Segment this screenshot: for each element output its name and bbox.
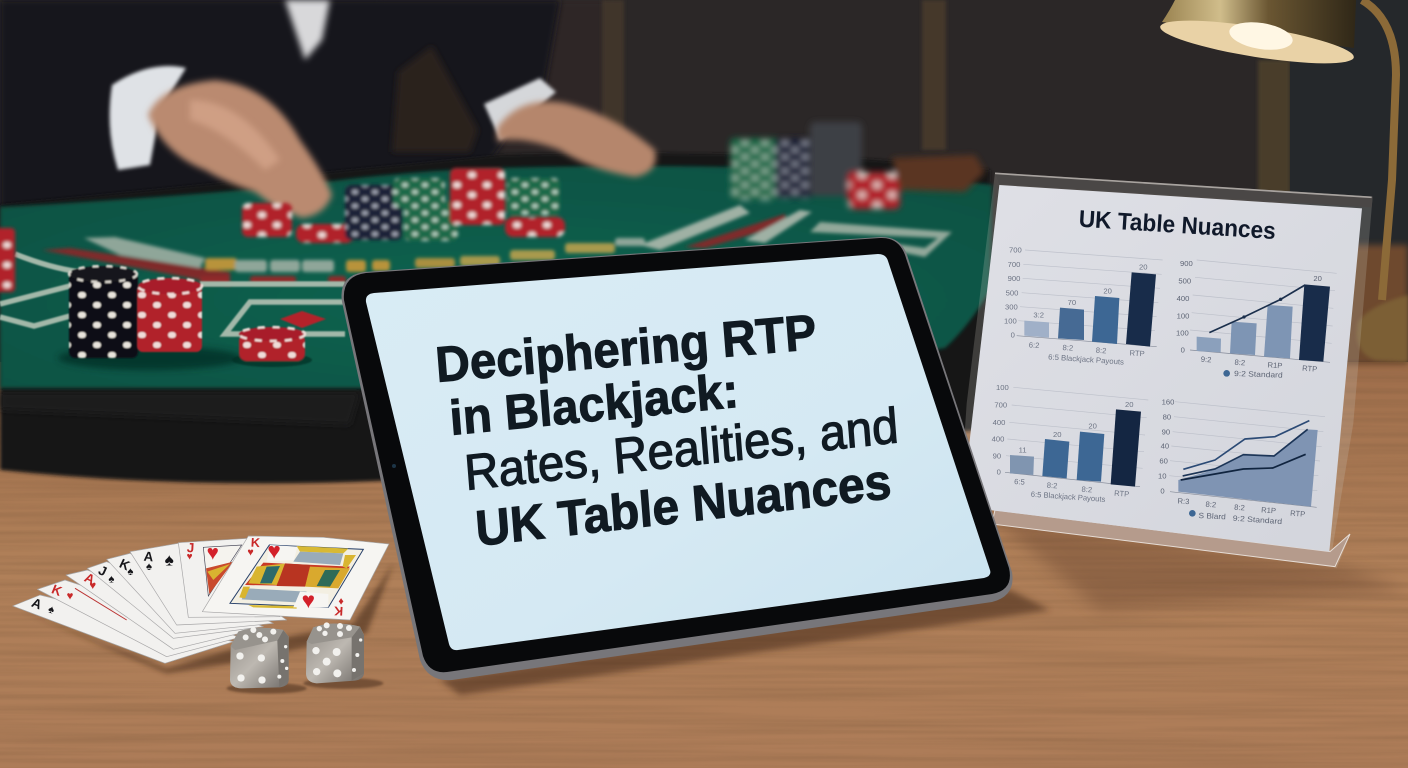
chart: top-left bars: 500 [1006,288,1018,297]
chart: top-left bars: 70 [1068,298,1076,307]
chart: top-left bars: 20 [1103,287,1112,296]
king of hearts card [202,536,389,620]
chart: bottom-left bars: 700 [994,401,1007,410]
king of hearts card: ♥ [302,587,315,613]
left cuff [110,66,186,170]
chart: bottom-right area and lines: 0 [1160,486,1165,495]
chart: bottom-right area and lines: 160 [1162,397,1174,406]
chart: bottom-right area and lines: 9:2 Standard [1233,514,1282,526]
card pips: A [143,549,154,565]
chart: top-left bars [1004,246,1163,367]
tablet shadow [440,590,1050,695]
lamp shade [1162,0,1356,48]
acrylic frame [960,173,1373,568]
card pips: A [82,570,97,588]
dealer jacket [0,0,560,215]
playing cards fan [13,536,393,673]
chart: bottom-left bars: 0 [997,467,1001,476]
chart: bottom-left bars: 20 [1053,430,1062,439]
chart: top-right bars with line: 100 [1177,311,1189,320]
front camera [392,464,396,468]
king of hearts card: K [333,603,343,618]
chart: bottom-left bars: 400 [992,435,1004,444]
chart: top-right bars with line: 9:2 [1201,355,1212,364]
chart: top-left bars: 100 [1004,316,1017,325]
card pips: J [187,540,195,555]
chart: bottom-left bars: 100 [996,383,1009,392]
card: ace of hearts [66,570,253,649]
chart: top-left bars: 700 [1008,260,1020,269]
dealer arms and hands [110,66,656,218]
king of hearts card: K [251,536,261,550]
chart: bottom-left bars: RTP [1114,489,1130,499]
chart: top-left bars: RTP [1129,348,1145,358]
right cuff [484,78,556,140]
far chip stacks [242,168,565,243]
chart: bottom-left bars: 400 [993,418,1005,427]
table lines [0,254,345,334]
small red chip stack [232,327,312,367]
chart: bottom-left bars: 20 [1088,422,1097,431]
card pips [30,540,195,617]
die left [230,627,289,688]
dice [227,622,383,694]
chart: bottom-left bars: 8:2 [1081,485,1092,494]
dealer shirt [285,0,330,60]
chart: bottom-right area and lines: R:3 [1177,496,1190,506]
card: jack of hearts [178,538,280,617]
chart: top-left bars: 8:2 [1096,346,1107,355]
die right [306,622,364,683]
chart: top-right bars with line: 400 [1177,294,1189,303]
legend dot [1189,510,1196,517]
card pips: ♥ [67,590,74,602]
chart: top-left bars: 8:2 [1062,343,1073,353]
card pips: ♥ [187,551,193,562]
chart: top-left bars: 0 [1011,331,1015,340]
desk lamp [1158,0,1408,362]
chart: bottom-left bars: 8:2 [1047,481,1058,490]
blackjack table [0,153,992,483]
card shadow [20,563,393,673]
chart: top-right bars with line: RTP [1302,364,1318,374]
card pips: K [117,556,132,574]
legend dot [1223,370,1230,377]
card pips: ♠ [146,561,152,573]
black chip stack [69,266,138,358]
paper [962,185,1362,552]
card: ace of spades high [130,543,287,625]
chart: bottom-right area and lines: 8:2 [1205,500,1216,509]
card pips: ♠ [108,573,114,585]
chart: top-left bars: 300 [1005,302,1018,311]
left hand [148,80,332,218]
tablet screen [366,254,990,650]
jack card art [203,545,242,596]
chart: bottom-right area and lines: 80 [1163,412,1171,421]
chart: top-right bars with line: 500 [1178,277,1191,286]
tablet [341,237,1013,680]
chart: bottom-left bars: 6:5 [1014,477,1025,487]
tablet heading: in Blackjack: [448,364,740,446]
chart: bottom-right area and lines [1158,397,1325,526]
chart: bottom-right area and lines: 90 [1162,427,1170,436]
tablet metal edge [341,237,1013,680]
chart: bottom-left bars [992,383,1148,504]
wall background [0,0,1408,400]
table rim [0,153,990,483]
chart: top-left bars: 3:2 [1033,310,1044,319]
chart: top-left bars: 900 [1008,274,1020,283]
gap between arm and body [392,46,478,152]
chart: bottom-right area and lines: RTP [1290,509,1306,519]
chart: top-right bars with line: 0 [1181,346,1185,355]
chart: top-right bars with line: 20 [1313,274,1322,283]
dealer torso [0,0,560,215]
king of hearts card: ♥ [267,537,281,563]
chart: bottom-right area and lines: S Blard [1198,511,1226,521]
tablet heading [433,304,900,557]
card: king of hearts [37,580,240,657]
chart: bottom-left bars: 20 [1125,400,1134,409]
chart: top-right bars with line: 100 [1176,328,1189,337]
chart: bottom-left bars: 90 [993,451,1001,460]
lamp base [1357,295,1408,362]
chart: bottom-right area and lines: 8:2 [1234,503,1245,512]
card pips: ♠ [127,566,133,578]
king of hearts card: ♥ [247,546,254,558]
chart: top-left bars: 700 [1009,246,1022,255]
chart: top-right bars with line: 9:2 Standard [1234,369,1283,380]
chart: top-left bars: 6:5 Blackjack Payouts [1048,352,1124,367]
diamond marker [280,311,326,328]
playing cards fan: ♥ [207,541,219,564]
card: jack of spades [87,562,263,638]
shade underside [1158,12,1356,72]
chart: top-left bars: 6:2 [1029,340,1040,350]
chart: top-right bars with line [1176,259,1337,380]
card pips: K [50,582,64,599]
chart: top-right bars with line: 8:2 [1234,358,1245,367]
front chip stacks [0,228,312,370]
card: king of spades [107,553,273,633]
wood table surface [0,245,1408,768]
chart: top-left bars: 20 [1139,262,1148,271]
right hand [497,101,656,177]
tablet heading: UK Table Nuances [473,453,893,557]
chart: bottom-left bars: 6:5 Blackjack Payouts [1031,490,1106,504]
red chips left edge [0,228,15,292]
lamp arm [1362,0,1396,300]
chart: bottom-right area and lines: 10 [1158,471,1167,480]
red chip stack [137,278,202,352]
card pips: A [30,595,44,613]
tablet heading: Deciphering RTP [433,304,818,393]
distant chip stacks [730,122,985,209]
card pips: ♥ [89,580,96,592]
chart: bottom-left bars: 11 [1019,446,1027,455]
tablet heading: Rates, Realities, and [462,397,900,501]
bulb [1227,18,1295,54]
sign shadow on table [990,515,1408,610]
acrylic base [992,510,1350,567]
green felt [0,166,992,388]
acrylic sign: UK Table Nuances [960,173,1373,568]
tablet bezel [344,238,1010,672]
king of hearts card: ♦ [338,596,344,608]
chart: top-right bars with line: 900 [1180,259,1193,268]
chart: bottom-right area and lines: 60 [1159,456,1168,465]
card pips: J [96,562,109,579]
card: ace of spades [13,595,233,663]
acrylic top band [995,173,1373,207]
card pips: ♠ [165,549,174,569]
betting markings [42,205,952,286]
chart: top-right bars with line: R1P [1267,360,1283,370]
sign title: UK Table Nuances [1078,206,1277,245]
chart: bottom-right area and lines: R1P [1261,505,1276,515]
card pips: ♠ [46,603,56,617]
chart: bottom-right area and lines: 40 [1161,442,1169,451]
